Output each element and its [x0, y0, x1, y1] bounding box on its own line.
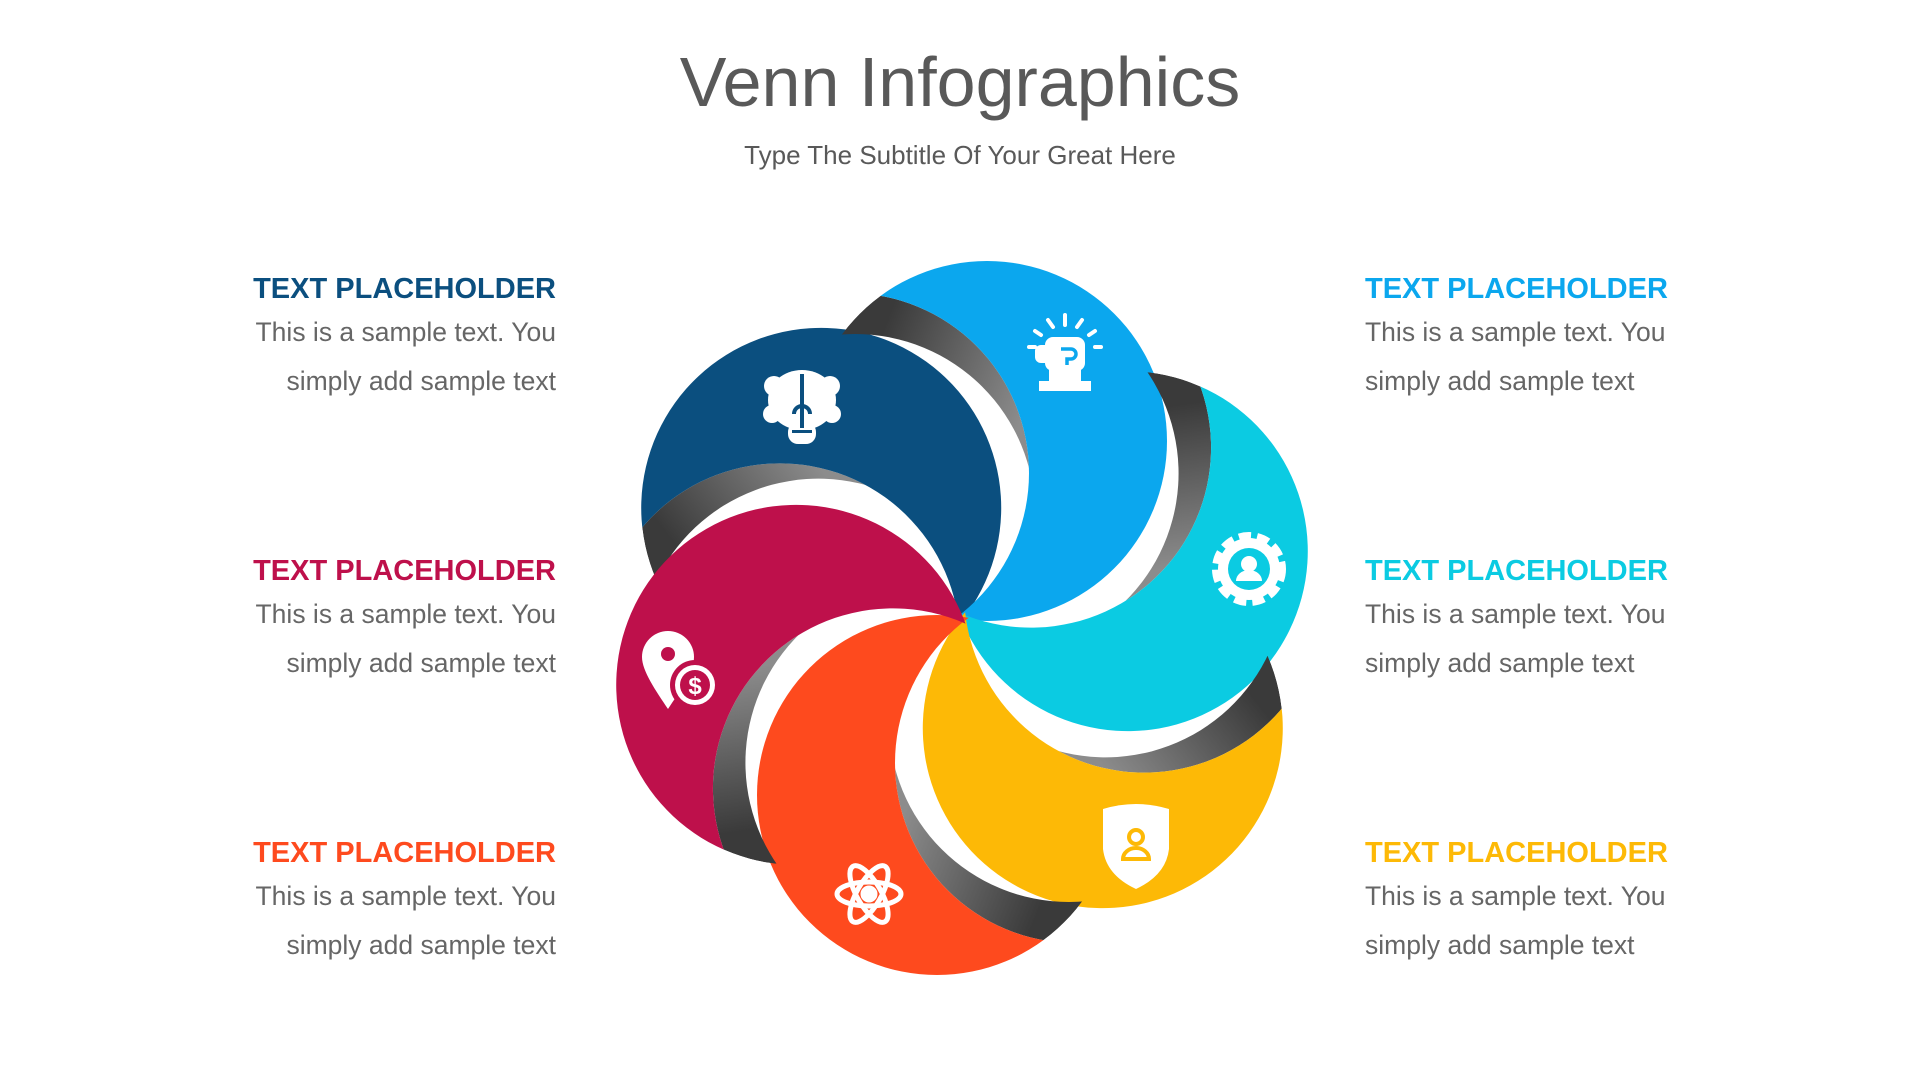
text block: left 1: This is a sample text. You [256, 317, 556, 347]
petal: cyan [962, 372, 1308, 732]
title: Venn Infographics [680, 43, 1240, 121]
text block: left 2: This is a sample text. You [256, 599, 556, 629]
petal: yellow [922, 612, 1283, 908]
text block: right 2 [1365, 555, 1668, 678]
subtitle: Type The Subtitle Of Your Great Here [744, 140, 1176, 170]
text block: right 1: This is a sample text. You [1365, 317, 1666, 347]
text block: right 2: TEXT PLACEHOLDER [1365, 555, 1668, 587]
petal: blue [807, 261, 1167, 621]
text block: left 3: This is a sample text. You [256, 881, 556, 911]
text block: left 3: simply add sample text [286, 930, 556, 960]
text block: right 3 [1365, 837, 1668, 960]
petal: orange [757, 615, 1117, 975]
text block: right 3: This is a sample text. You [1365, 881, 1666, 911]
icon: shield with user [1103, 804, 1169, 889]
text block: left 3 [253, 837, 556, 960]
text block: left 1 [253, 273, 556, 396]
pinwheel venn diagram [616, 261, 1308, 975]
petal: navy [641, 328, 1002, 614]
text block: right 1: simply add sample text [1365, 366, 1635, 396]
icon: fist with rays [1029, 315, 1101, 391]
petal: crimson [616, 504, 966, 864]
text block: right 2: simply add sample text [1365, 648, 1635, 678]
text block: right 1: TEXT PLACEHOLDER [1365, 273, 1668, 305]
icon: location pin with dollar [642, 631, 720, 710]
text block: right 2: This is a sample text. You [1365, 599, 1666, 629]
icon: atom [837, 860, 901, 928]
text block: left 2: simply add sample text [286, 648, 556, 678]
icon: location pin with dollar: $ [688, 673, 702, 700]
text block: left 2 [253, 555, 556, 678]
text block: right 3: TEXT PLACEHOLDER [1365, 837, 1668, 869]
text block: left 3: TEXT PLACEHOLDER [253, 837, 556, 869]
text block: left 1: TEXT PLACEHOLDER [253, 273, 556, 305]
icon: brain bulb [763, 370, 841, 444]
text block: left 1: simply add sample text [286, 366, 556, 396]
text block: left 2: TEXT PLACEHOLDER [253, 555, 556, 587]
text block: right 3: simply add sample text [1365, 930, 1635, 960]
icon: gear with user [1218, 538, 1280, 600]
text block: right 1 [1365, 273, 1668, 396]
